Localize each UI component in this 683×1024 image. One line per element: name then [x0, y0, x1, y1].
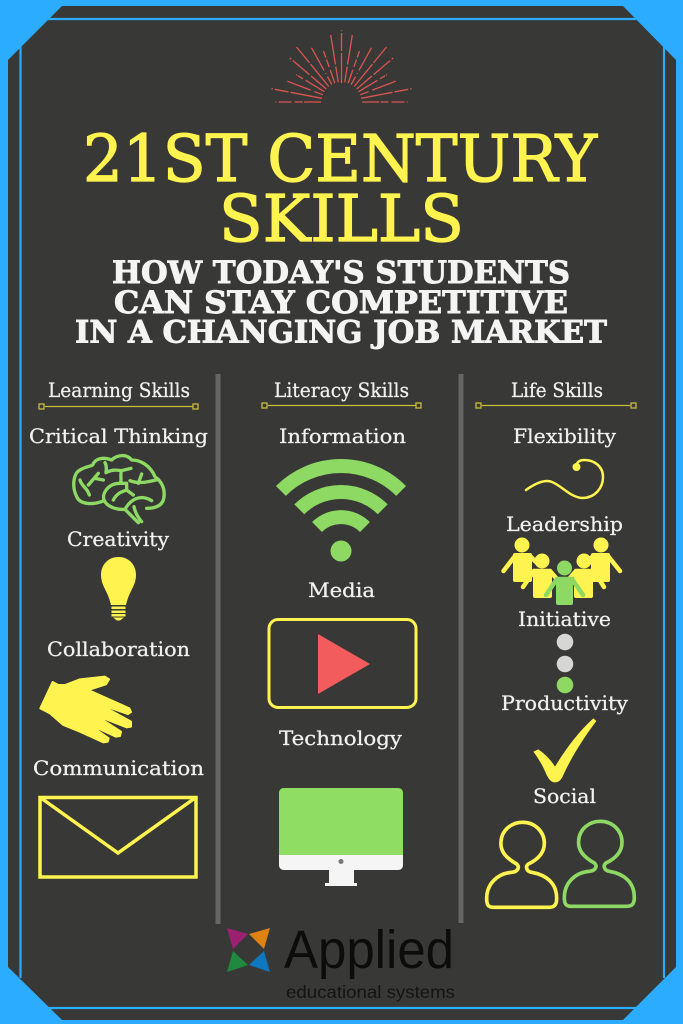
icon: swirl — [526, 460, 603, 498]
icon: green user — [564, 821, 634, 906]
icon: video player — [269, 620, 416, 708]
heading: learning skills: Learning Skills — [48, 378, 190, 402]
wordmark: Applied — [284, 920, 454, 980]
icon: light bulb — [101, 557, 136, 620]
label: creativity: Creativity — [67, 527, 170, 551]
subtitle: IN A CHANGING JOB MARKET — [75, 314, 607, 350]
subtitle: CAN STAY COMPETITIVE — [114, 285, 568, 321]
panel: life skills — [476, 378, 636, 907]
title — [83, 122, 598, 257]
label: collaboration: Collaboration — [47, 637, 190, 661]
icon: wifi — [281, 466, 401, 562]
icon: logo mark — [227, 928, 270, 972]
connector: literacy skills — [262, 403, 421, 408]
subtitle — [75, 255, 607, 350]
logo: applied educational systems — [227, 920, 455, 1002]
icon: envelope — [40, 798, 196, 877]
label: technology: Technology — [279, 726, 403, 750]
panel: learning skills — [29, 378, 208, 877]
label: communication: Communication — [33, 756, 204, 780]
label: initiative: Initiative — [518, 607, 611, 631]
label: critical thinking: Critical Thinking — [29, 424, 208, 448]
label: media: Media — [308, 578, 375, 602]
icon: brain — [74, 456, 164, 523]
label: information: Information — [279, 424, 406, 448]
label: flexibility: Flexibility — [513, 424, 617, 448]
icon: hand — [40, 677, 131, 742]
column dividers — [216, 374, 464, 924]
icon: progress dots — [557, 634, 573, 693]
icon: check mark — [533, 718, 596, 782]
connector: learning skills — [39, 404, 198, 409]
heading: literacy skills: Literacy Skills — [274, 378, 409, 402]
label: social: Social — [533, 784, 596, 808]
tagline: educational systems — [286, 982, 455, 1002]
icon: two users — [487, 821, 634, 907]
icon: team of people — [504, 538, 620, 605]
heading: life skills: Life Skills — [511, 378, 603, 402]
title: SKILLS — [219, 182, 464, 257]
icon: monitor — [279, 788, 403, 886]
connector: life skills — [476, 403, 636, 408]
subtitle: HOW TODAY'S STUDENTS — [112, 255, 570, 291]
label: productivity: Productivity — [501, 691, 629, 715]
panel: literacy skills — [262, 378, 421, 886]
title: 21ST CENTURY — [83, 122, 598, 197]
icon: yellow user — [487, 822, 557, 907]
label: leadership: Leadership — [506, 512, 623, 536]
icon: sunburst — [272, 30, 412, 102]
